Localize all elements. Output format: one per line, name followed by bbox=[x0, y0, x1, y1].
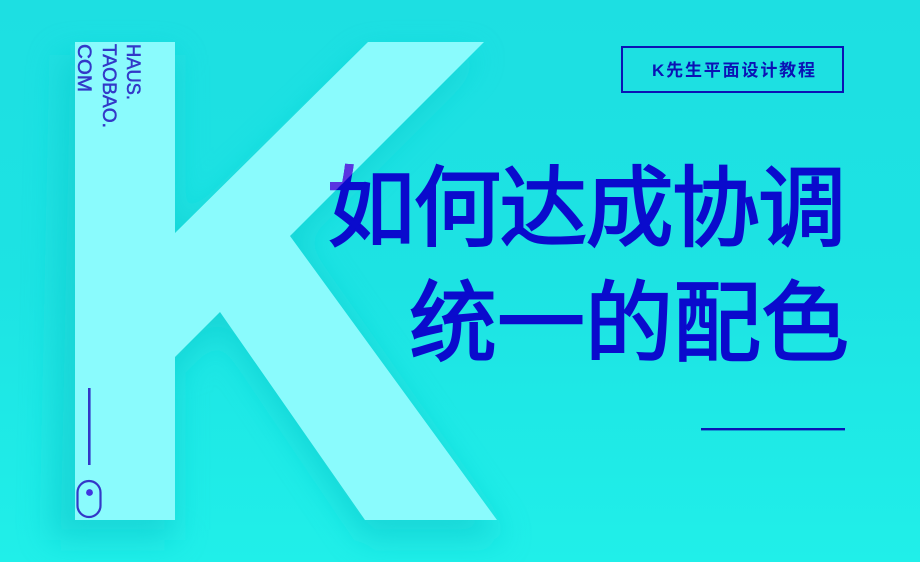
vertical url text bbox=[73, 44, 144, 128]
title: 如何达成协调 bbox=[327, 159, 846, 258]
vertical url text: COM bbox=[73, 44, 95, 92]
title bbox=[327, 159, 849, 373]
title: 统一的配色 bbox=[409, 274, 849, 373]
vertical url text: HAUS. bbox=[122, 44, 144, 100]
giant letter K bbox=[75, 42, 497, 520]
title overlap on K: 如何达成协调 bbox=[327, 159, 846, 258]
vertical line bbox=[88, 388, 91, 465]
accent line bbox=[701, 428, 845, 430]
illustration canvas bbox=[46, 42, 847, 546]
vertical url text: TAOBAO. bbox=[98, 44, 120, 128]
icon: mouse scroll bbox=[78, 481, 100, 517]
tag box bbox=[622, 47, 843, 92]
tag box: K先生平面设计教程 bbox=[652, 61, 815, 80]
letter K shadow bbox=[50, 55, 505, 540]
